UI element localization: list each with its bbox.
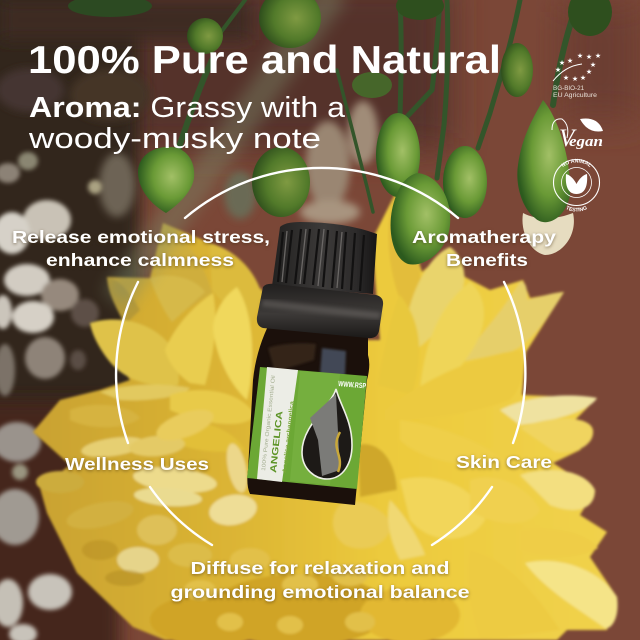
icon: EU organic stars: ★ [567,57,573,65]
icon: vegan: V [559,125,577,152]
icon: EU organic stars: ★ [580,74,586,82]
icon: EU organic stars: ★ [586,68,592,76]
green label: 100% Pure Organic Essential Oil [261,375,277,471]
label: aromatherapy benefits: Benefits [446,250,528,270]
pale petal under bottle [333,502,392,548]
label: emotional stress: Release emotional stress, [12,227,270,247]
green label [247,367,367,489]
upper right petals [388,190,421,320]
label: aromatherapy benefits: Aromatherapy [412,227,556,247]
label: wellness uses: Wellness Uses [65,454,209,474]
arc ring [116,168,525,545]
glass body [247,322,369,505]
green label: ANGELICA [268,410,285,473]
bud left [138,147,194,213]
label: diffuse: Diffuse for relaxation and [190,558,450,578]
green buds and stems [68,0,612,265]
bud centre [252,147,310,217]
cap ribbed top [272,222,377,294]
flower [33,190,618,640]
upper left petals [210,243,262,330]
label: emotional stress [12,227,270,270]
label: diffuse: grounding emotional balance [170,582,470,602]
icon: EU organic stars: ★ [563,74,569,82]
icon: EU organic stars: ★ [572,75,578,83]
label white strip [257,367,298,482]
blurred beige spots behind buds [0,68,378,224]
buds right cluster [376,113,420,197]
drop icon [302,389,352,479]
icon: vegan [552,118,603,152]
icon: EU organic stars [553,52,601,99]
bottle [247,222,383,505]
green label: WWW.RSP [338,379,367,390]
title: 100% Pure and Natural [28,39,501,82]
icon: EU organic stars: ★ [595,52,601,60]
icon: EU organic stars: ★ [586,53,592,61]
flower silhouette [33,190,617,640]
cap collar [257,284,383,338]
blurred stem veil across flower [115,0,335,300]
icon: EU organic stars: ★ [577,52,583,60]
label: skin care: Skin Care [456,452,552,472]
bottom golden florets [150,574,460,640]
aroma text: Aroma: Grassy with a [29,92,346,124]
icon: EU organic stars: ★ [590,61,596,69]
label: emotional stress: enhance calmness [46,250,234,270]
label: diffuse [170,558,470,602]
aroma text second line: woody-musky note [28,123,321,155]
icon: EU organic stars: ★ [555,66,561,74]
icon: no animal testing [552,158,600,212]
left middle petals [100,385,190,400]
buds top right [501,43,533,97]
icon: no animal testing: NO ANIMAL [561,158,590,168]
icon: no animal testing: TESTING [566,206,587,212]
icon: EU organic stars: BG-BIO-21 [553,85,585,92]
icon: vegan: egan [569,134,603,150]
white blossoms on the left [0,152,102,640]
label: aromatherapy benefits [412,227,556,270]
icon: EU organic stars: ★ [559,59,565,67]
lower right petals [520,418,593,453]
icon: EU organic stars: EU Agriculture [553,92,598,99]
green label: Angelica archangelica [282,400,296,473]
bud top [259,0,321,48]
shaded inner petal [358,444,397,497]
